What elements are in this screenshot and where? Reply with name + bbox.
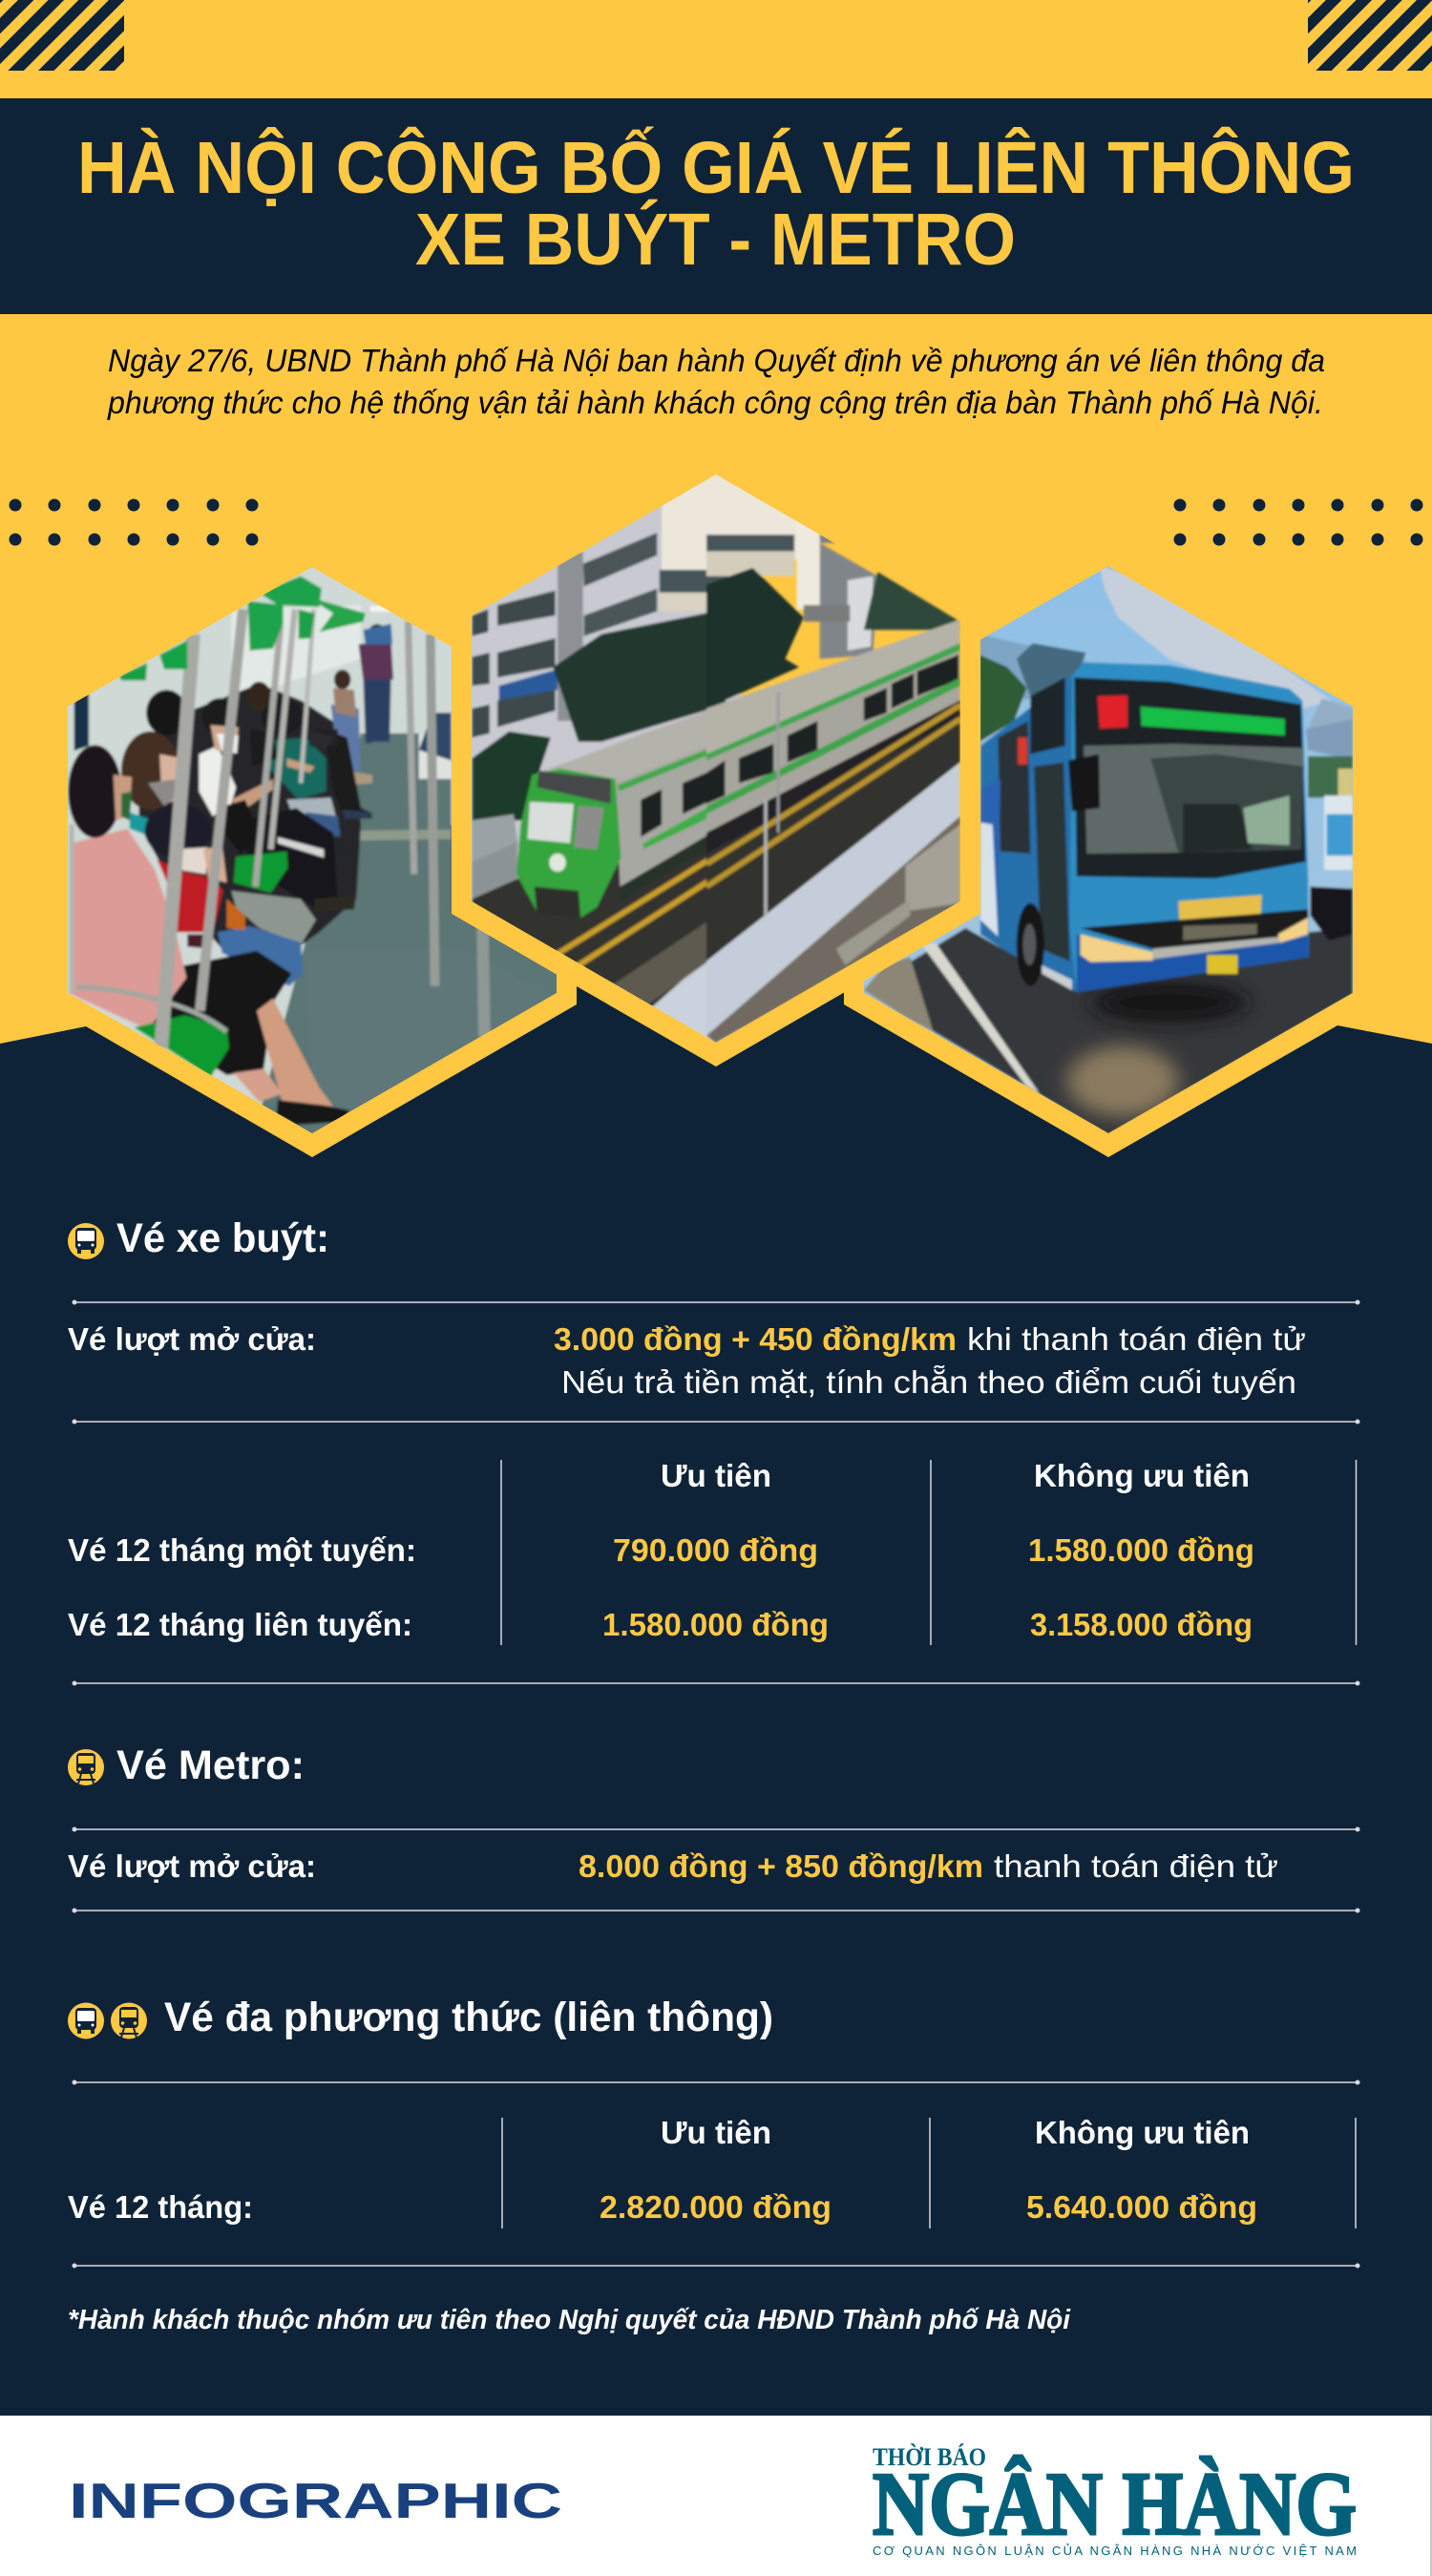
legs and shoes: [257, 999, 333, 1107]
icon: metro: [68, 1749, 104, 1785]
standing man: [359, 641, 393, 681]
section: multimodal tickets: [68, 1995, 1359, 2269]
child: [145, 804, 212, 857]
green handles: [247, 601, 284, 650]
table: 12 month bus tickets: [68, 1458, 1254, 1642]
train roof and body: [706, 620, 960, 754]
black hair: [68, 745, 121, 837]
table: 12 month bus tickets: Vé 12 tháng liên tuyến:: [68, 1607, 412, 1642]
intro text: Ngày 27/6, UBND Thành phố Hà Nội ban hành Quyết định về phương án vé liên thông đa: [108, 343, 1325, 378]
heading: multimodal tickets: Vé đa phương thức (liên thông): [164, 1995, 773, 2040]
footer: [0, 2416, 1432, 2576]
section: metro tickets: [68, 1742, 1359, 1913]
bus front: [1069, 663, 1309, 992]
icon: bus and metro: [68, 2003, 147, 2039]
white barrier: [706, 763, 960, 1036]
white shirt man: [199, 746, 236, 816]
table: 12 month bus tickets: 1.580.000 đồng: [1028, 1532, 1254, 1568]
heading: metro tickets: Vé Metro:: [116, 1742, 305, 1788]
navy lower panel: [0, 986, 1432, 2416]
row: single ticket: [68, 1321, 1306, 1400]
table: multimodal prices: Ưu tiên: [661, 2115, 771, 2150]
row: single ticket: Nếu trả tiền mặt, tính chẵn theo điểm cuối tuyến: [561, 1364, 1296, 1400]
fence: [472, 812, 519, 862]
table: 12 month bus tickets: Vé 12 tháng một tuyến:: [68, 1532, 416, 1568]
newspaper logo: CƠ QUAN NGÔN LUẬN CỦA NGÂN HÀNG NHÀ NƯỚC VIỆT NAM: [873, 2544, 1357, 2558]
title: XE BUÝT - METRO: [415, 198, 1016, 281]
seat front: [135, 1015, 229, 1077]
poles: [161, 634, 194, 1048]
motorbike: [1311, 887, 1353, 940]
dots left: [10, 498, 258, 546]
row: metro single ticket: thanh toán điện tử: [994, 1848, 1278, 1884]
black trousers: [144, 951, 291, 1075]
track bed: [472, 847, 708, 1006]
intro text: phương thức cho hệ thống vận tải hành khách công cộng trên địa bàn Thành phố Hà Nội.: [107, 385, 1323, 420]
row: single ticket: Vé lượt mở cửa:: [68, 1321, 316, 1357]
row: metro single ticket: Vé lượt mở cửa:: [68, 1848, 316, 1884]
train body: [536, 710, 707, 783]
table: 12 month bus tickets: 3.158.000 đồng: [1030, 1607, 1253, 1642]
table: multimodal prices: Không ưu tiên: [1035, 2115, 1250, 2150]
heading: bus tickets: Vé xe buýt:: [116, 1215, 329, 1261]
dots right: [1174, 498, 1422, 546]
icon: bus: [68, 1223, 104, 1259]
table: multimodal prices: [68, 2115, 1257, 2225]
newspaper logo: THỜI BÁO: [873, 2443, 986, 2471]
table: 12 month bus tickets: 1.580.000 đồng: [602, 1607, 829, 1642]
photo: passengers inside metro carriage: [68, 567, 557, 1133]
table: 12 month bus tickets: Không ưu tiên: [1034, 1458, 1250, 1493]
bus side: [980, 675, 1077, 992]
black tracksuit legs: [241, 808, 338, 907]
intro text: [107, 343, 1325, 420]
footnote: *Hành khách thuộc nhóm ưu tiên theo Nghị quyết của HĐND Thành phố Hà Nội: [68, 2305, 1071, 2335]
table: multimodal prices: Vé 12 tháng:: [68, 2189, 253, 2225]
track: [706, 700, 960, 961]
woman with brown hair: [121, 731, 179, 810]
newspaper logo: NGÂN HÀNG: [873, 2455, 1357, 2554]
table: multimodal prices: 5.640.000 đồng: [1026, 2189, 1257, 2225]
label: infographic: INFOGRAPHIC: [69, 2474, 562, 2529]
road: [864, 928, 1353, 1135]
row: metro single ticket: [68, 1848, 1278, 1884]
stripes top right: [1308, 0, 1432, 71]
blue jeans: [218, 926, 303, 986]
grey trousers: [231, 891, 316, 944]
table: multimodal prices: 2.820.000 đồng: [600, 2189, 832, 2225]
title band: [0, 98, 1432, 314]
row: metro single ticket: 8.000 đồng + 850 đồng/km: [579, 1848, 983, 1884]
row: single ticket: 3.000 đồng + 450 đồng/km: [554, 1321, 957, 1357]
table: 12 month bus tickets: 790.000 đồng: [613, 1532, 818, 1568]
green seats: [234, 852, 287, 893]
stripes top left: [0, 0, 124, 71]
teal jacket: [269, 737, 328, 800]
bumper: [1081, 909, 1308, 949]
middle photo yellow frame: [452, 451, 980, 1066]
title: HÀ NỘI CÔNG BỐ GIÁ VÉ LIÊN THÔNG: [77, 126, 1355, 209]
photo: elevated metro train: [463, 460, 960, 1061]
section: bus tickets: [68, 1215, 1359, 1686]
photo: bus on street: [845, 556, 1363, 1144]
crowd backdrop: [138, 684, 361, 949]
row: single ticket: khi thanh toán điện tử: [967, 1321, 1306, 1357]
table: 12 month bus tickets: Ưu tiên: [661, 1458, 771, 1493]
far seated people: [331, 705, 361, 772]
pink blouse: [70, 829, 186, 1029]
trees: [553, 609, 726, 742]
title: [77, 126, 1355, 281]
